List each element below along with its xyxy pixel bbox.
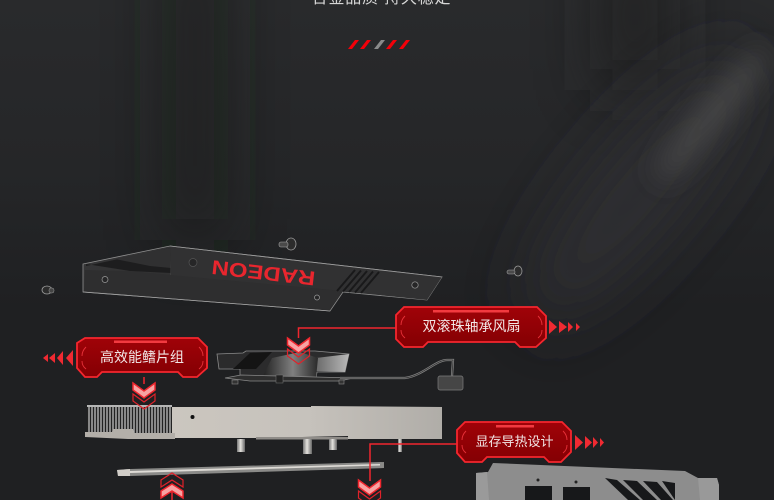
chevron: fins xyxy=(133,383,155,409)
arrows right of memory callout xyxy=(575,435,604,450)
decorative slash divider xyxy=(348,40,410,49)
callout: 显存导热设计: 显存导热设计 xyxy=(475,434,554,449)
heat pins xyxy=(237,439,245,452)
heatsink body xyxy=(172,406,442,439)
fan connector xyxy=(438,376,463,390)
callout: 双滚珠轴承风扇 xyxy=(396,307,546,347)
rear IO bracket xyxy=(476,463,719,500)
fan xyxy=(217,351,463,390)
arrows left of callout xyxy=(43,350,73,366)
connector line: fins xyxy=(143,377,145,384)
bracket holes xyxy=(102,258,418,300)
fan cable xyxy=(340,360,453,378)
heatsink xyxy=(85,405,442,454)
heatsink fins xyxy=(87,405,173,434)
chevron: memory xyxy=(358,480,380,500)
screw top xyxy=(279,238,296,250)
screw right xyxy=(507,266,522,276)
connector line: lower chevron xyxy=(171,490,173,500)
heatsink base xyxy=(85,429,175,439)
backplate bracket with RADEON logo xyxy=(83,246,442,311)
chevron: upward xyxy=(161,473,183,498)
screw left xyxy=(42,286,54,294)
connector line: fan xyxy=(298,328,396,338)
RADEON logo: RADEON xyxy=(211,255,316,289)
callout: 双滚珠轴承风扇: 双滚珠轴承风扇 xyxy=(422,318,520,334)
arrows right of fan callout xyxy=(549,320,580,334)
callout: 显存导热设计 xyxy=(457,422,571,462)
chevron: fan xyxy=(288,338,310,364)
bracket vents xyxy=(337,270,379,293)
connector line: memory xyxy=(370,444,457,481)
callout: 高效能鳍片组 xyxy=(77,338,207,377)
heat pipe xyxy=(117,462,384,476)
callout: 高效能鳍片组: 高效能鳍片组 xyxy=(100,349,184,365)
